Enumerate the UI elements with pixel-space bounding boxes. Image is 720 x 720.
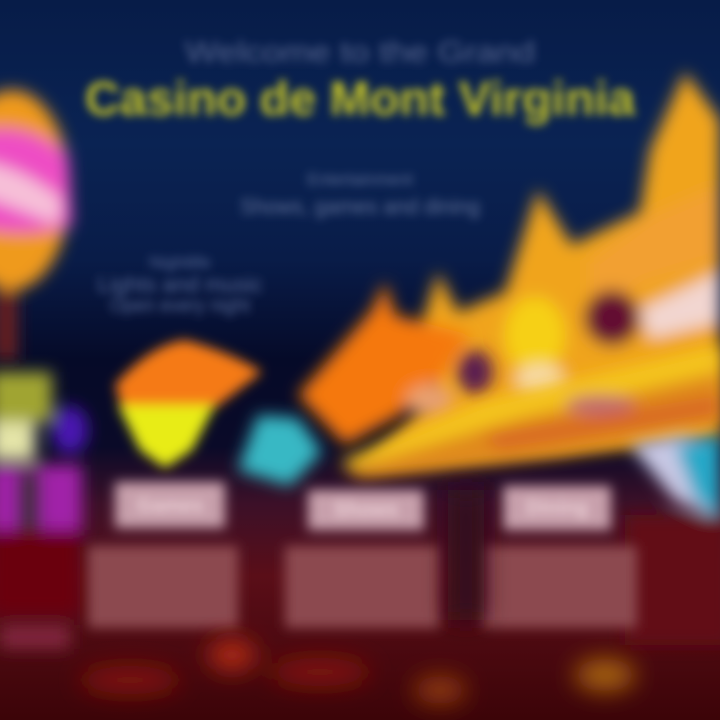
panel: right card [482, 486, 637, 628]
card labels: Dining [526, 497, 588, 519]
caption: lower text block: Open every night [110, 295, 250, 317]
left lower lantern [0, 372, 88, 649]
panel: middle card [285, 490, 440, 628]
caption: upper text block: Entertainment [307, 170, 413, 189]
card labels: Shows [334, 499, 398, 521]
floor glow spots [80, 490, 635, 704]
caption: upper text block: Shows, games and dining [240, 194, 480, 219]
caption: lower text block [98, 253, 262, 317]
centre lantern [115, 340, 262, 468]
caption: lower text block: Nightlife [149, 253, 211, 272]
left balloon [0, 90, 72, 360]
caption: upper text block [240, 170, 480, 219]
orange roof shape [298, 282, 493, 445]
title: Casino de Mont Virginia [85, 73, 635, 126]
subtitle: Welcome to the Grand [185, 36, 535, 69]
golden palace [360, 72, 720, 470]
card labels [137, 495, 588, 521]
palace eaves [340, 345, 720, 478]
card labels: Games [137, 495, 203, 517]
right lantern [625, 435, 720, 645]
panel: left card [88, 482, 238, 628]
caption: lower text block: Lights and music [98, 272, 262, 297]
cyan lantern [238, 415, 322, 486]
